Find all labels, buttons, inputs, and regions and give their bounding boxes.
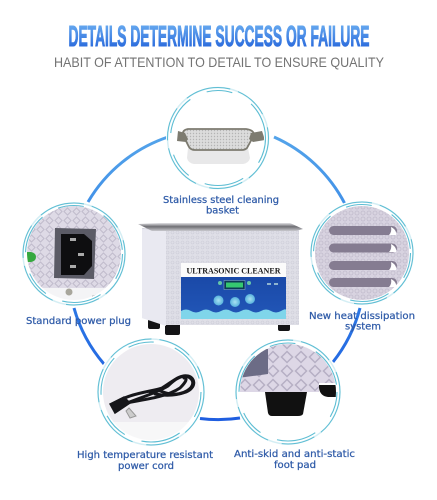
panel: foot pad xyxy=(234,338,342,446)
panel: power cord xyxy=(96,337,210,447)
panel: standard power plug xyxy=(20,200,130,308)
ultrasonic cleaner machine xyxy=(138,223,303,335)
label: foot pad: Anti-skid and anti-static xyxy=(234,449,355,460)
control panel xyxy=(181,277,286,319)
label: foot pad: foot pad xyxy=(274,460,316,471)
label: stainless steel basket: basket xyxy=(206,206,239,216)
panel: stainless steel basket xyxy=(166,86,270,190)
subtitle: HABIT OF ATTENTION TO DETAIL TO ENSURE QUALITY xyxy=(54,54,385,70)
panel: heat dissipation xyxy=(310,201,414,305)
feet xyxy=(148,319,290,335)
machine name: ULTRASONIC CLEANER xyxy=(186,266,281,276)
icon: rubber foot xyxy=(265,392,307,416)
label: power cord: power cord xyxy=(118,461,174,472)
icon: power socket xyxy=(54,228,96,279)
icon: vent slots xyxy=(329,226,397,287)
icon: basket xyxy=(177,129,265,164)
label: standard power plug: Standard power plug xyxy=(26,316,131,327)
label: heat dissipation: system xyxy=(345,322,381,332)
label: heat dissipation: New heat dissipation xyxy=(309,311,415,322)
blue connecting ring xyxy=(74,137,360,420)
icon: black cord xyxy=(110,376,194,418)
label: power cord: High temperature resistant xyxy=(77,450,213,461)
label: stainless steel basket: Stainless steel cleaning xyxy=(163,195,279,206)
